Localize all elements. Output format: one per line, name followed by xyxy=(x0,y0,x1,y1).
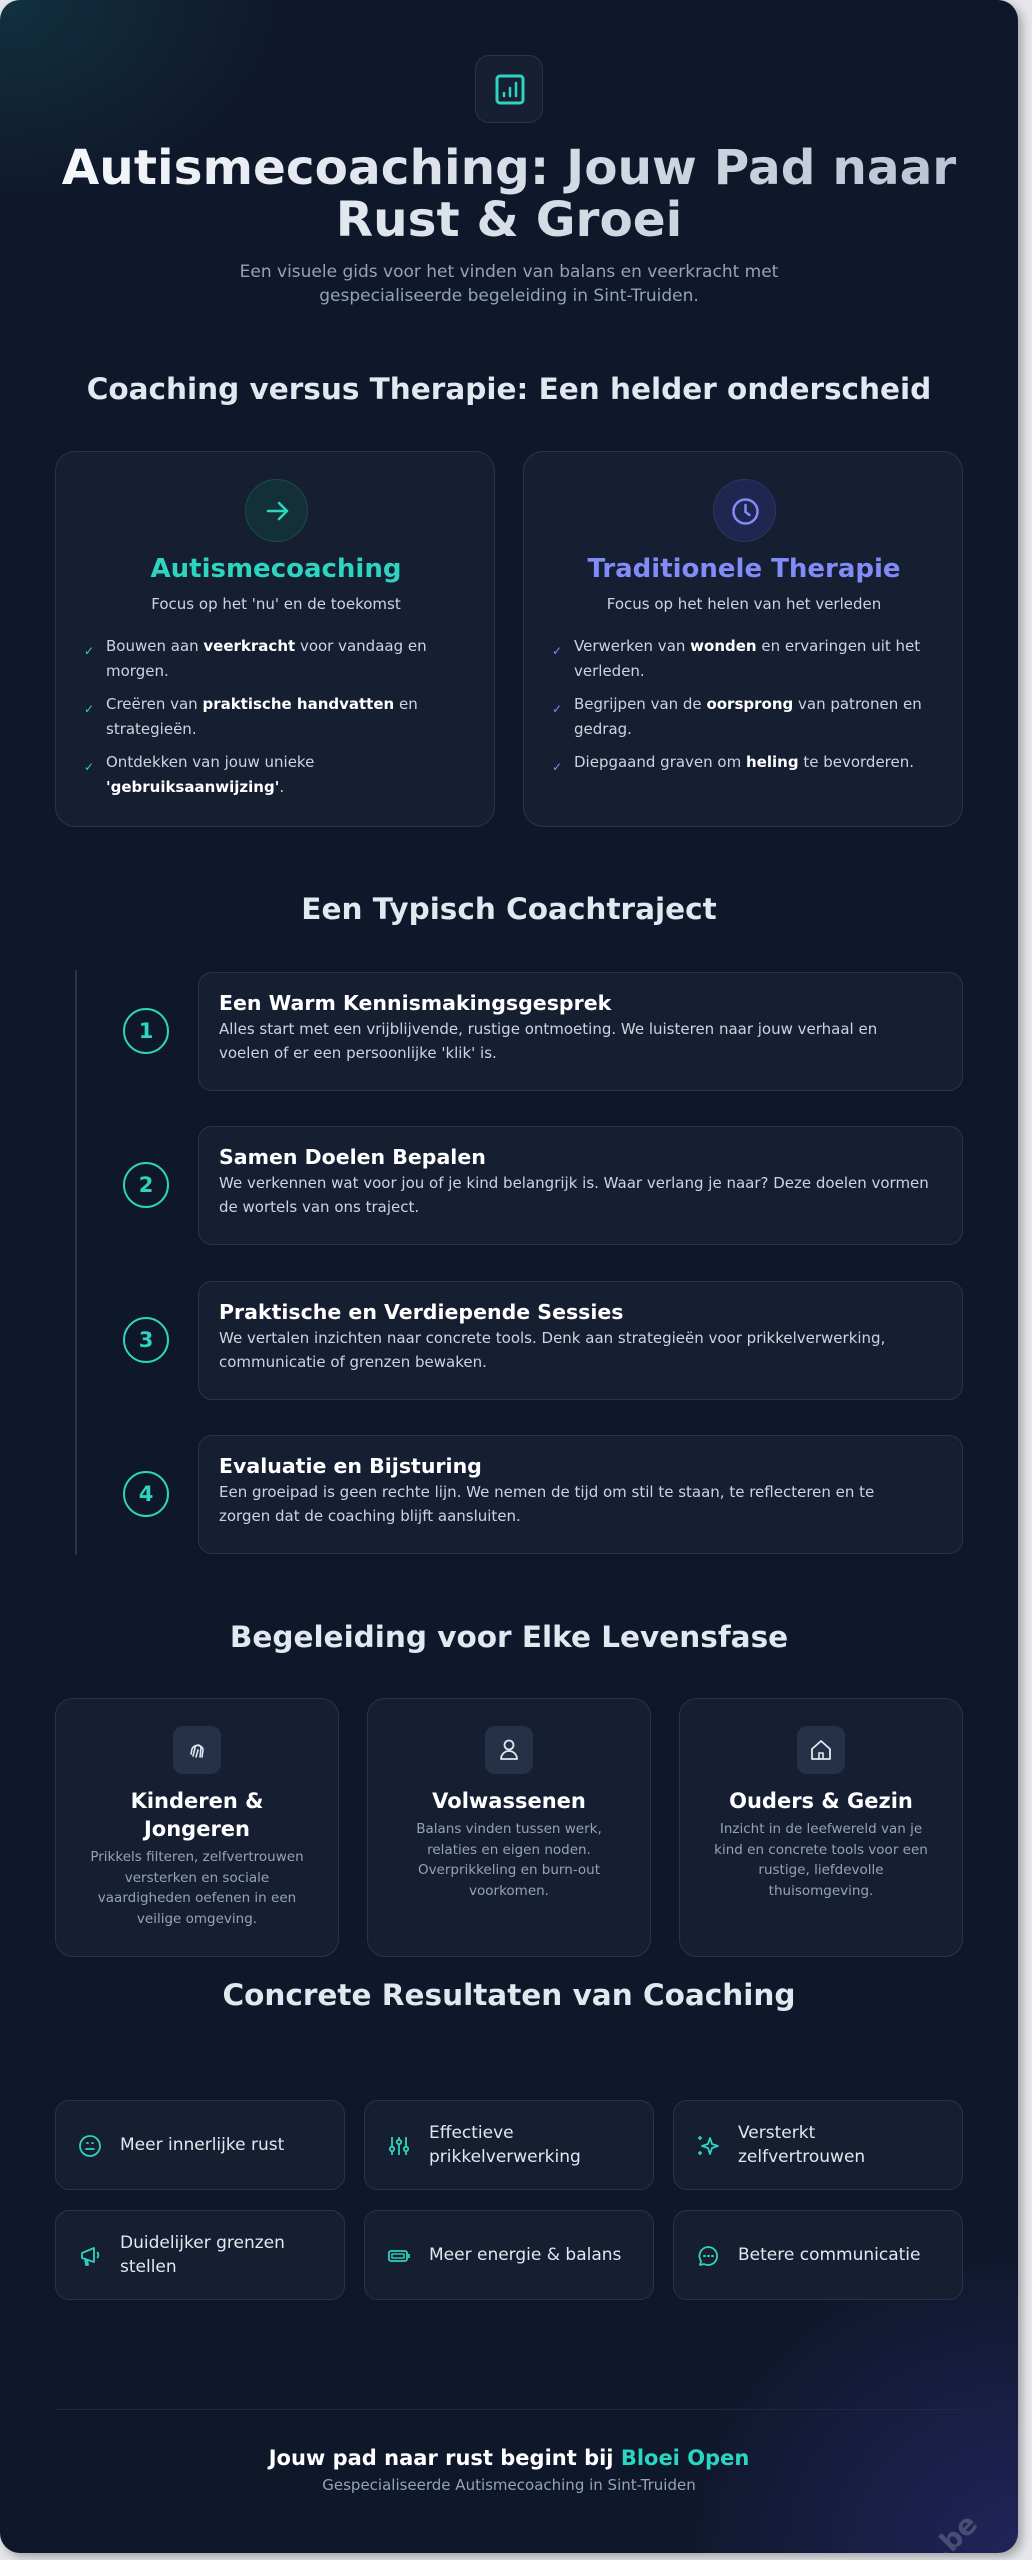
result: energie xyxy=(364,2210,654,2300)
panel: therapie: Diepgaand graven om heling te bevorderen. xyxy=(574,753,914,771)
panel: volwassenen: Balans vinden tussen werk, relaties en eigen noden. Overprikkeling en burn-out voorkomen. xyxy=(416,1821,602,1898)
step 3 xyxy=(123,1281,963,1400)
result: prikkelverwerking: Effectieve prikkelverwerking xyxy=(429,2123,581,2167)
panel: kinderen xyxy=(55,1698,339,1957)
footer xyxy=(55,2409,963,2519)
panel: therapie xyxy=(523,451,963,827)
result: communicatie: Betere communicatie xyxy=(738,2245,920,2265)
title: Autismecoaching: Jouw Pad naar Rust & Groei xyxy=(62,140,956,248)
subtitle: Een visuele gids voor het vinden van balans en veerkracht met gespecialiseerde begeleiding in Sint-Truiden. xyxy=(240,262,778,306)
step 3: We vertalen inzichten naar concrete tools. Denk aan strategieën voor prikkelverwerking, communicatie of grenzen bewaken. xyxy=(219,1329,885,1371)
footer subline: Gespecialiseerde Autismecoaching in Sint-Truiden xyxy=(322,2476,696,2494)
panel: autismecoaching: ✓ xyxy=(84,702,94,716)
step 3: Praktische en Verdiepende Sessies xyxy=(219,1300,624,1324)
heading: resultaten: Concrete Resultaten van Coaching xyxy=(222,1978,796,2012)
heading: coachtraject: Een Typisch Coachtraject xyxy=(301,892,717,926)
result: zelfvertrouwen: Versterkt zelfvertrouwen xyxy=(738,2123,865,2167)
panel: volwassenen xyxy=(367,1698,651,1957)
panel: autismecoaching: Creëren van praktische handvatten en strategieën. xyxy=(106,695,418,738)
panel: ouders: Ouders & Gezin xyxy=(729,1789,913,1813)
step 2: 2 xyxy=(139,1173,153,1197)
panel: autismecoaching: Ontdekken van jouw unieke 'gebruiksaanwijzing'. xyxy=(106,753,314,796)
step 3: 3 xyxy=(139,1328,153,1352)
panel: autismecoaching: ✓ xyxy=(84,760,94,774)
icon: arrow xyxy=(245,479,308,542)
step 1: Een Warm Kennismakingsgesprek xyxy=(219,991,611,1015)
step 2 xyxy=(123,1126,963,1245)
result: energie: Meer energie & balans xyxy=(429,2245,621,2265)
result: rust: Meer innerlijke rust xyxy=(120,2135,284,2155)
panel: therapie: ✓ xyxy=(552,760,562,774)
heading: coaching vs therapie: Coaching versus Therapie: Een helder onderscheid xyxy=(87,372,931,406)
panel: volwassenen: Volwassenen xyxy=(432,1789,586,1813)
icon: person xyxy=(485,1726,533,1774)
step 4: Een groeipad is geen rechte lijn. We nemen de tijd om stil te staan, te reflecteren en te zorgen dat de coaching blijft aansluiten. xyxy=(219,1483,874,1525)
icon: home xyxy=(797,1726,845,1774)
panel: ouders: Inzicht in de leefwereld van je kind en concrete tools voor een rustige, liefdevolle thuisomgeving. xyxy=(714,1821,928,1898)
panel: ouders xyxy=(679,1698,963,1957)
result: rust xyxy=(55,2100,345,2190)
footer heading: Jouw pad naar rust begint bij Bloei Open xyxy=(269,2446,749,2470)
panel: therapie: Focus op het helen van het verleden xyxy=(607,595,881,613)
step 4: 4 xyxy=(139,1482,153,1506)
step 2: Samen Doelen Bepalen xyxy=(219,1145,486,1169)
result: grenzen xyxy=(55,2210,345,2300)
step 1: Alles start met een vrijblijvende, rustige ontmoeting. We luisteren naar jouw verhaal en voelen of er een persoonlijke 'klik' is. xyxy=(219,1020,877,1062)
icon: fingerprint xyxy=(173,1726,221,1774)
panel: therapie: Begrijpen van de oorsprong van patronen en gedrag. xyxy=(574,695,922,738)
step 4 xyxy=(123,1435,963,1554)
panel: therapie: Verwerken van wonden en ervaringen uit het verleden. xyxy=(574,637,920,680)
step 1 xyxy=(123,972,963,1091)
heading: Autismecoaching xyxy=(151,554,401,584)
list xyxy=(84,637,427,796)
timeline xyxy=(75,970,77,1555)
panel: autismecoaching: ✓ xyxy=(84,644,94,658)
list xyxy=(552,637,922,774)
panel: autismecoaching: Focus op het 'nu' en de toekomst xyxy=(151,595,401,613)
result: communicatie xyxy=(673,2210,963,2300)
step 4: Evaluatie en Bijsturing xyxy=(219,1454,482,1478)
panel: therapie: ✓ xyxy=(552,644,562,658)
panel: autismecoaching xyxy=(55,451,495,827)
step 2: We verkennen wat voor jou of je kind belangrijk is. Waar verlang je naar? Deze doelen vormen de wortels van ons traject. xyxy=(219,1174,929,1216)
panel: autismecoaching: Bouwen aan veerkracht voor vandaag en morgen. xyxy=(106,637,427,680)
icon: header chart xyxy=(475,55,543,123)
icon: clock xyxy=(713,479,776,542)
panel: kinderen: Prikkels filteren, zelfvertrouwen versterken en sociale vaardigheden oefenen in een veilige omgeving. xyxy=(90,1849,304,1926)
panel: kinderen: Kinderen & Jongeren xyxy=(131,1789,263,1841)
heading: Traditionele Therapie xyxy=(587,554,901,584)
step 1: 1 xyxy=(139,1019,153,1043)
result: zelfvertrouwen xyxy=(673,2100,963,2190)
result: grenzen: Duidelijker grenzen stellen xyxy=(120,2233,285,2277)
heading: levensfase: Begeleiding voor Elke Levensfase xyxy=(230,1620,788,1654)
panel: therapie: ✓ xyxy=(552,702,562,716)
result: prikkelverwerking xyxy=(364,2100,654,2190)
